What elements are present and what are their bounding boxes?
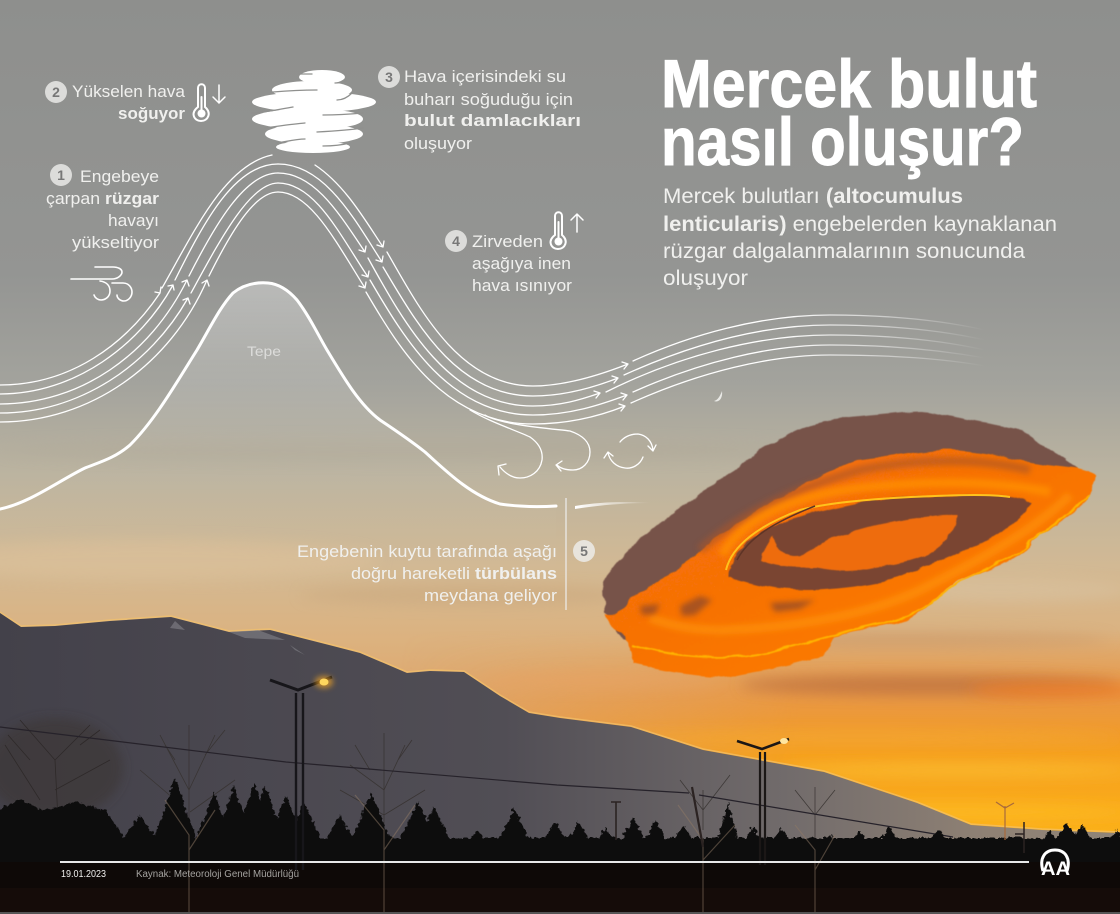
title: Mercek bulut (661, 46, 1037, 122)
bare tree mass at left (0, 718, 123, 860)
footer (60, 861, 1029, 880)
step 2: soğuyor (118, 104, 185, 123)
step 4: hava ısınıyor (472, 276, 572, 295)
step 4 (445, 212, 583, 295)
step 3: oluşuyor (404, 134, 472, 153)
badge 5 (573, 540, 595, 562)
subtitle paragraph (663, 185, 1057, 290)
cloud orange body (605, 450, 1097, 677)
title: nasıl oluşur? (661, 104, 1024, 180)
step 5 (297, 498, 595, 610)
step 5: meydana geliyor (424, 586, 557, 605)
icon: thermometer with up arrow (551, 212, 583, 249)
downstream wave segments (606, 315, 985, 403)
icon: thermometer with down arrow (194, 84, 225, 121)
tree line silhouette (0, 778, 1120, 914)
hill label: Tepe (247, 343, 281, 359)
background: sunset sky (0, 297, 1120, 833)
mountain silhouette (0, 612, 1120, 880)
step 3: buharı soğuduğu için (404, 90, 573, 109)
rising segments (0, 155, 278, 422)
cloud inner orange swirl (760, 515, 958, 571)
step 3: Hava içerisindeki su (404, 67, 566, 86)
step 1 (46, 164, 159, 252)
step 3 (378, 66, 581, 153)
step 4: Zirveden (472, 232, 543, 251)
badge 2 (45, 81, 67, 103)
street lamp right (611, 738, 1024, 865)
icon: cloud formation (252, 70, 376, 153)
icon: wind (71, 267, 132, 301)
source: Kaynak: Meteoroloji Genel Müdürlüğü (136, 869, 299, 880)
hill diagram (0, 283, 652, 600)
date: 19.01.2023 (61, 869, 106, 880)
cloud yellow inner ring (726, 495, 1010, 570)
step 5: doğru hareketli türbülans (351, 564, 557, 583)
descending segments (278, 164, 628, 424)
subtitle paragraph: lenticularis) engebelerden kaynaklanan (663, 213, 1057, 236)
title (661, 46, 1037, 180)
cloud shaded top band (700, 461, 1030, 550)
step 3: bulut damlacıkları (404, 111, 581, 130)
step 1: havayı (108, 211, 159, 230)
crescent moon (714, 391, 722, 401)
step 1: Engebeye (80, 167, 159, 186)
lenticular cloud photo (603, 411, 1097, 677)
logo: AA (1041, 850, 1070, 880)
badge 5: 5 (580, 543, 588, 559)
badge 1: 1 (57, 167, 65, 183)
turbulence curl arrows (470, 410, 656, 478)
cloud bright rim (632, 495, 1090, 657)
power line (0, 727, 953, 837)
step 2: Yükselen hava (72, 82, 186, 101)
step 1: çarpan rüzgar (46, 189, 159, 208)
badge 2: 2 (52, 84, 60, 100)
subtitle paragraph: oluşuyor (663, 267, 748, 290)
logo: AA: AA (1041, 859, 1070, 880)
badge 3: 3 (385, 69, 393, 85)
subtitle paragraph: Mercek bulutları (altocumulus (663, 185, 963, 208)
hill fill (0, 283, 556, 600)
cloud dark top (603, 411, 1078, 650)
step 4: aşağıya inen (472, 254, 571, 273)
step 2 (45, 81, 225, 123)
cloud inner dark eye (730, 495, 1033, 590)
step 5: Engebenin kuytu tarafında aşağı (297, 542, 557, 561)
cloud dark patches (640, 596, 815, 616)
badge 3 (378, 66, 400, 88)
badge 4: 4 (452, 233, 460, 249)
bare trees over the mountain (140, 725, 835, 840)
cloud lit band under the eye (650, 495, 1070, 630)
wind streamlines (0, 155, 985, 424)
subtitle paragraph: rüzgar dalgalanmalarının sonucunda (663, 240, 1025, 263)
hill outline (0, 283, 556, 509)
cloud lit band above the eye (722, 483, 1050, 555)
step 1: yükseltiyor (72, 233, 159, 252)
street lamp left (270, 676, 333, 870)
tapered hill continuation (575, 502, 652, 509)
